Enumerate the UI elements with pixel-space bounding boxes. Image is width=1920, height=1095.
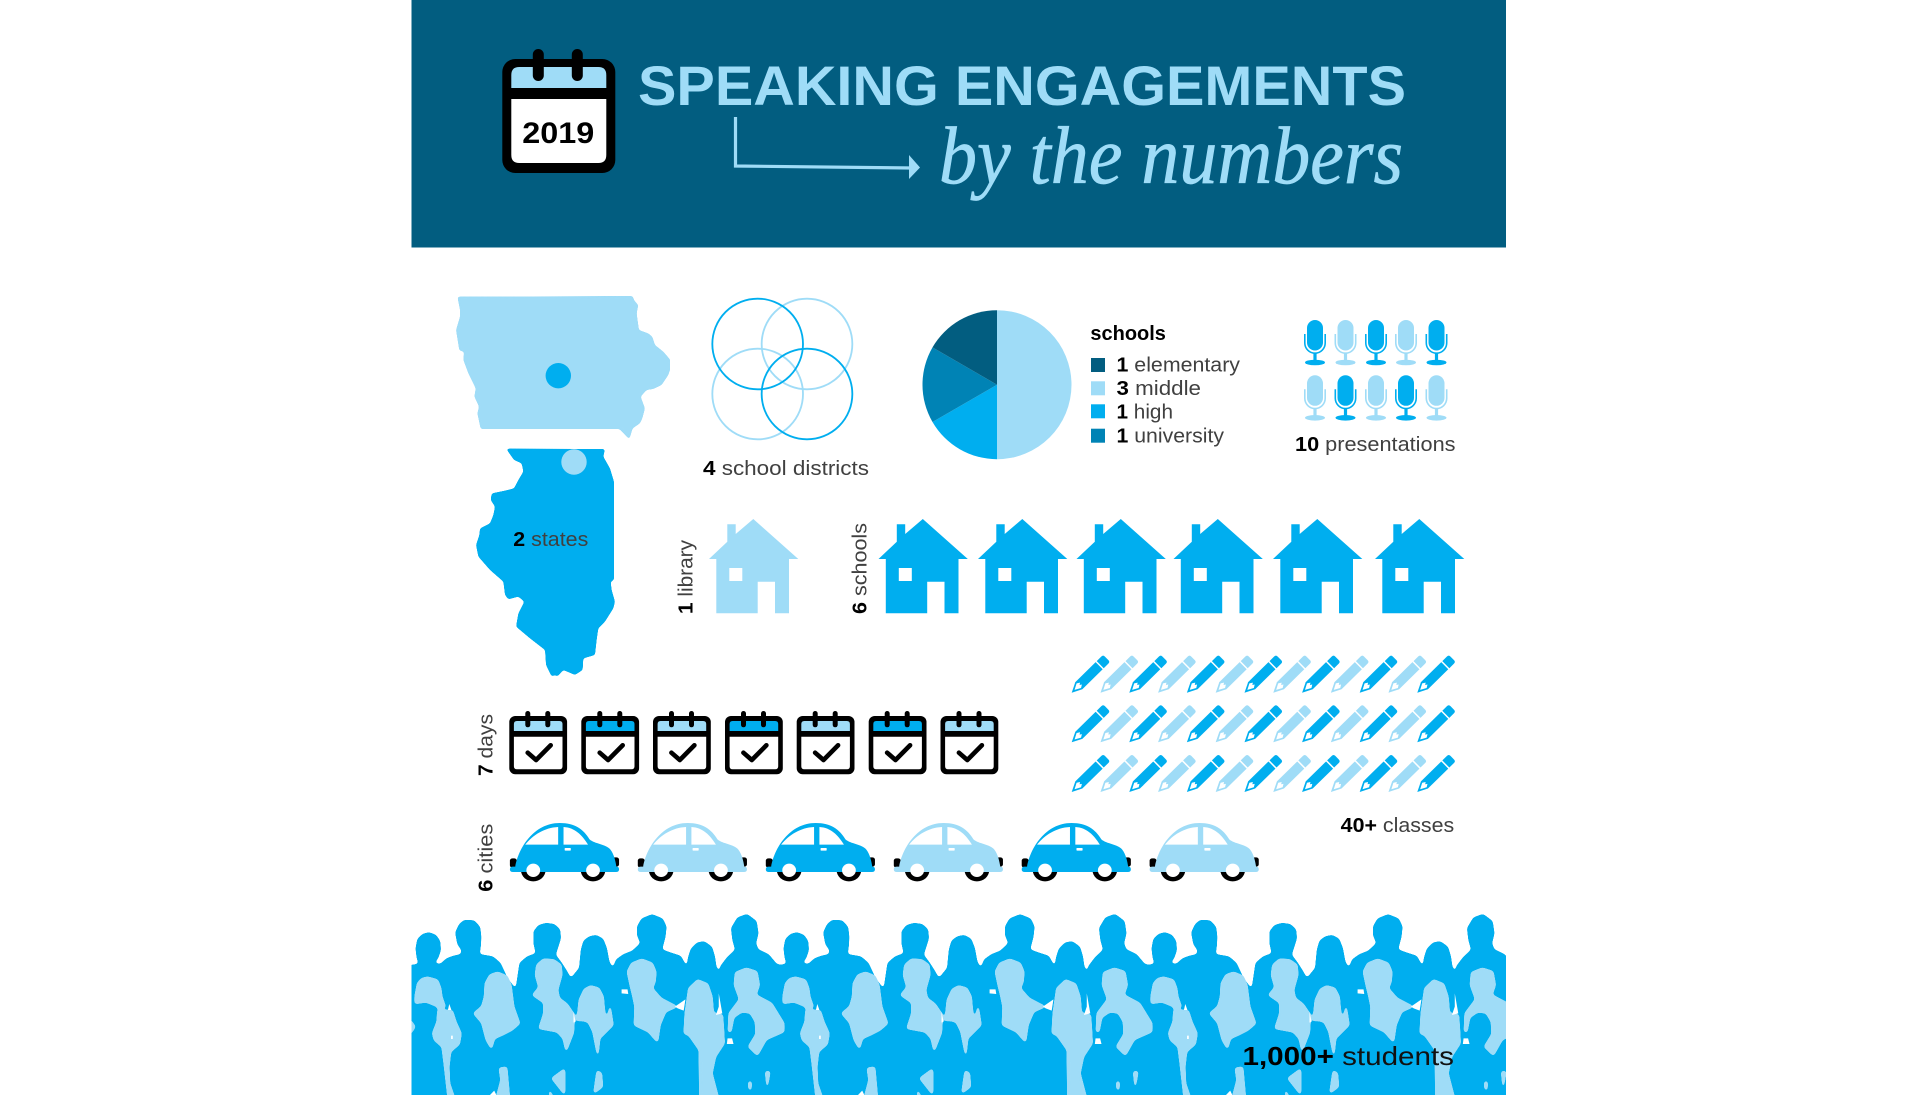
legend item: elementary: 1 elementary xyxy=(1116,354,1240,376)
map: Iowa xyxy=(456,296,672,439)
label: 40+ classes: 40+ classes xyxy=(1341,815,1454,837)
legend heading: schools xyxy=(1090,323,1166,345)
icons: school houses xyxy=(878,519,1464,613)
legend item: high: 1 high xyxy=(1116,401,1173,423)
arrow xyxy=(736,117,920,179)
panel: presentations xyxy=(1295,320,1456,456)
microphones xyxy=(1305,320,1447,421)
panel: classes xyxy=(1068,655,1456,837)
label: 6 cities: 6 cities xyxy=(476,824,498,892)
legend: schools xyxy=(1090,323,1240,448)
icon: library house xyxy=(709,519,798,613)
banner background xyxy=(412,0,1506,248)
icon: 2019 calendar xyxy=(502,49,615,173)
label: 6 schools: 6 schools xyxy=(850,523,872,614)
label: 10 presentations: 10 presentations xyxy=(1295,434,1456,456)
header banner xyxy=(412,0,1506,248)
label: 1,000+ students: 1,000+ students xyxy=(1242,1041,1454,1071)
panel: states xyxy=(456,296,672,677)
legend item: middle: 3 middle xyxy=(1116,378,1201,400)
label: 4 school districts: 4 school districts xyxy=(703,458,869,480)
icons: day calendars xyxy=(509,711,998,774)
legend item: high xyxy=(1091,401,1173,423)
title: SPEAKING ENGAGEMENTS xyxy=(638,54,1406,117)
crowd silhouettes xyxy=(408,915,1520,1095)
panel: students crowd xyxy=(408,915,1520,1095)
panel: days xyxy=(476,711,998,776)
panel: schools xyxy=(850,519,1464,614)
panel: school districts xyxy=(703,299,869,480)
panel: library xyxy=(676,519,798,614)
panel: cities xyxy=(476,823,1259,892)
label: 2 states: 2 states xyxy=(513,529,588,551)
icon: 2019 calendar: 2019 xyxy=(522,117,594,150)
label: 1 library: 1 library xyxy=(676,540,698,614)
pie chart: schools xyxy=(922,310,1072,459)
venn circles xyxy=(712,299,852,439)
label: 7 days: 7 days xyxy=(476,714,498,776)
icons: cars xyxy=(510,823,1259,881)
legend item: middle xyxy=(1091,378,1201,400)
subtitle: by the numbers xyxy=(939,110,1403,201)
legend item: university: 1 university xyxy=(1116,426,1224,448)
map: Illinois xyxy=(476,449,615,677)
icons: pencils xyxy=(1068,655,1456,796)
